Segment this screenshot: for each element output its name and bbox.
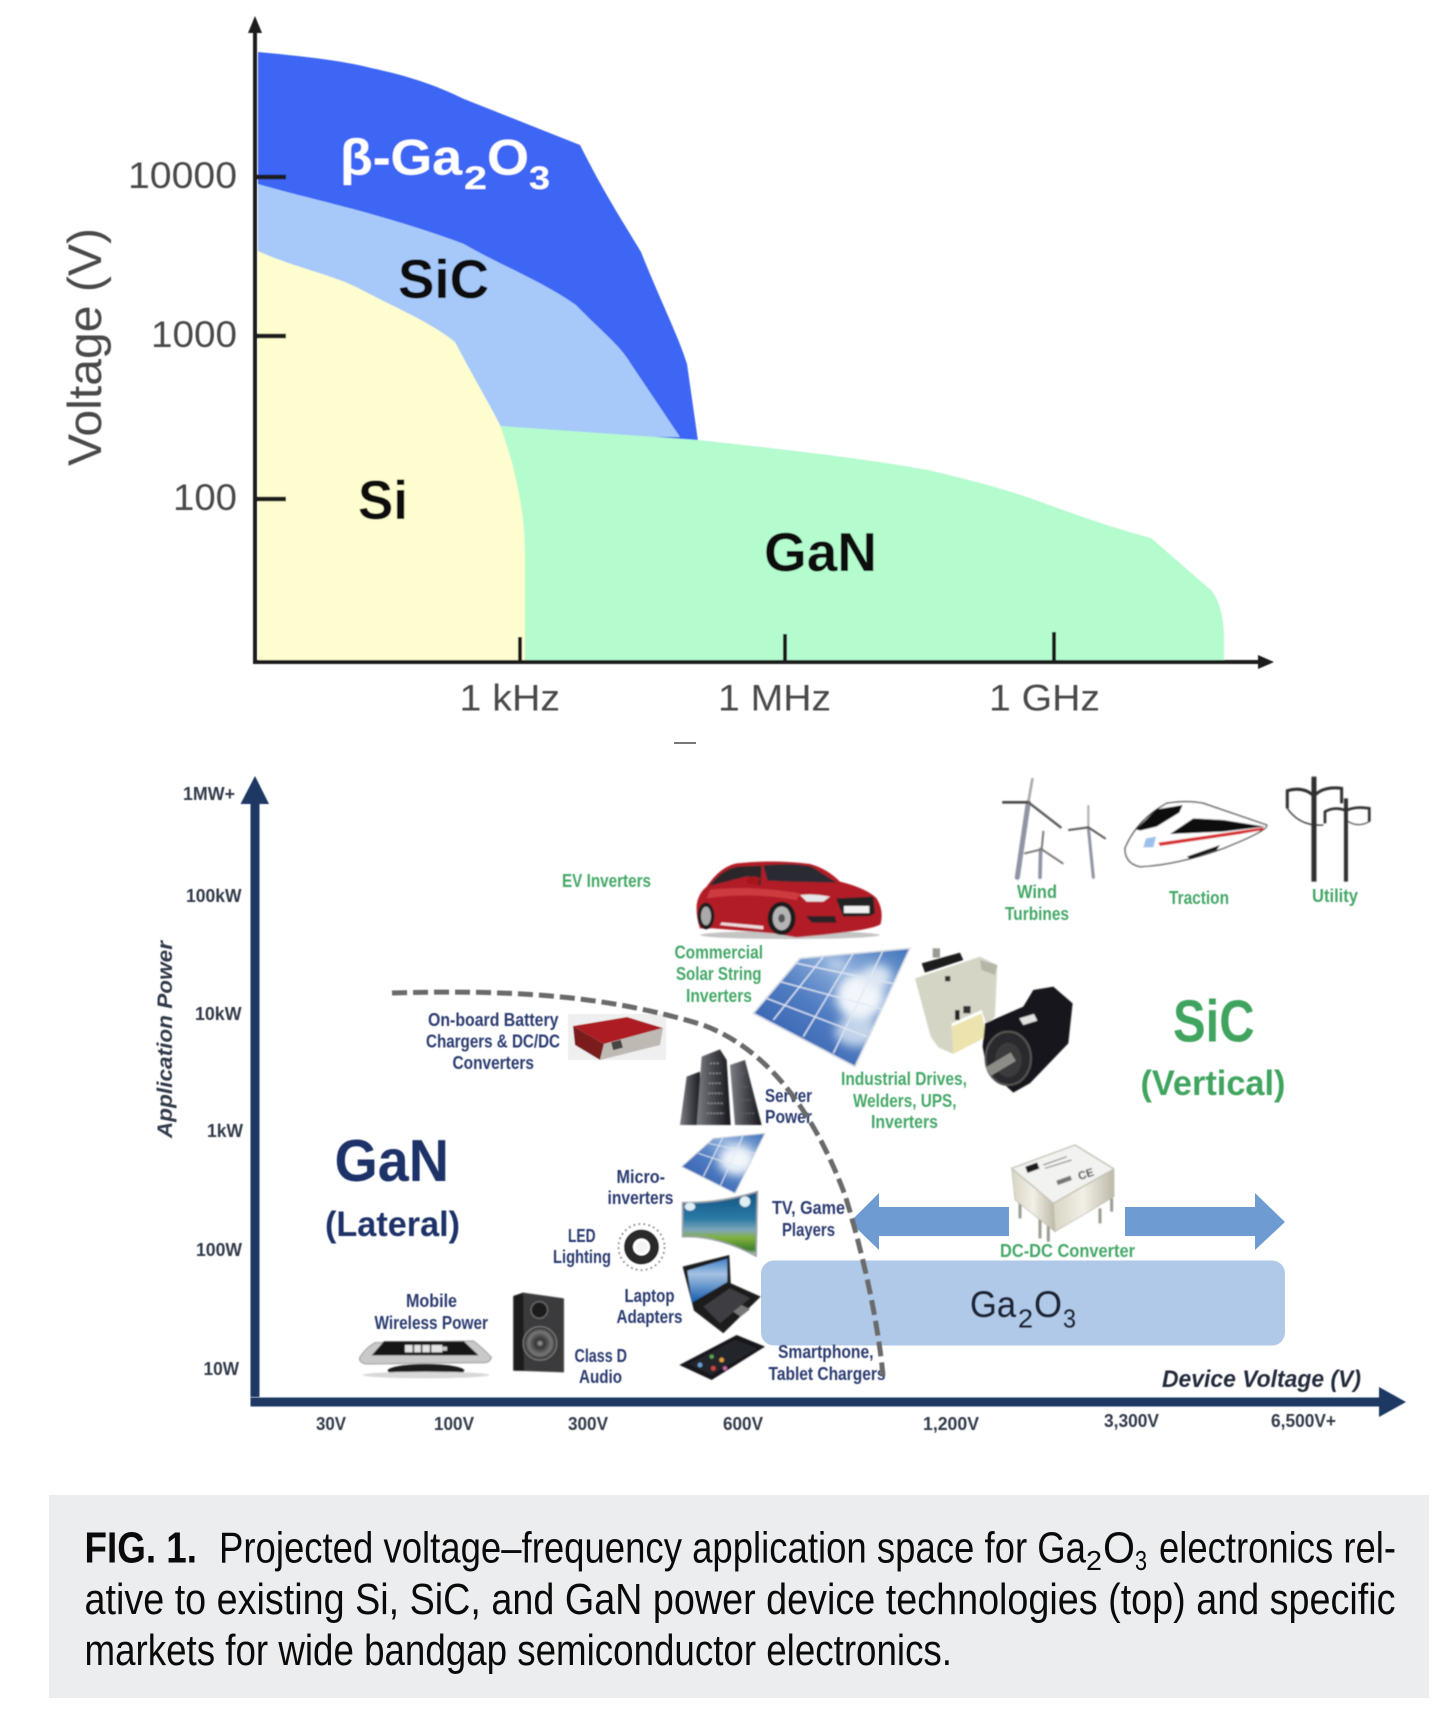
icon: utility poles — [1287, 777, 1369, 882]
application labels: SiC side: Wind — [1017, 882, 1057, 902]
y axis ticks — [255, 177, 286, 499]
arrow: right pointing voltage range — [1125, 1193, 1285, 1250]
icon: wind turbines — [1003, 779, 1105, 877]
x axis labels: 100V — [434, 1414, 474, 1434]
x tick label: 1 GHz: 1 GHz — [989, 678, 1100, 718]
application labels: SiC side: Traction — [1169, 888, 1229, 908]
y tick label: 1000: 1000 — [151, 314, 237, 355]
label: Ga2O3: Ga — [970, 1284, 1016, 1325]
application labels: SiC side — [562, 871, 1358, 1261]
application labels: GaN side: Audio — [579, 1367, 622, 1387]
application labels: GaN side: Mobile — [406, 1291, 457, 1311]
x axis ticks — [520, 632, 1054, 662]
application labels: GaN side: Players — [782, 1220, 835, 1240]
x tick label: 1 kHz: 1 kHz — [460, 678, 560, 718]
x axis title: Device Voltage (V) — [1162, 1366, 1361, 1393]
icon: electric car — [697, 861, 882, 939]
y axis labels — [183, 784, 243, 1379]
caption line 1: 3 — [1135, 1545, 1147, 1576]
label: GaN: GaN — [764, 521, 877, 583]
area: Si region — [258, 251, 525, 660]
application labels: GaN side: Server — [765, 1086, 812, 1106]
region label: GaN lateral: (Lateral) — [325, 1205, 460, 1244]
bottom chart: application power versus device voltage — [154, 776, 1406, 1434]
label: Ga2O3: 3 — [1063, 1304, 1076, 1334]
icon: LED light — [618, 1224, 664, 1270]
y tick label: 100: 100 — [173, 477, 237, 518]
application labels: GaN side: TV, Game — [772, 1198, 845, 1218]
x axis with arrow — [253, 655, 1274, 669]
y axis title: Application Power — [154, 939, 177, 1139]
label: beta-Ga2O3: 2 — [464, 160, 487, 196]
caption line 1: electronics rel- — [1159, 1524, 1396, 1572]
y axis labels: 1kW — [207, 1121, 243, 1141]
application labels: GaN side: inverters — [608, 1188, 674, 1208]
caption line 3: markets for wide bandgap semiconductor electronics. — [84, 1626, 952, 1675]
label: SiC: SiC — [398, 248, 489, 310]
region label: GaN lateral: GaN — [334, 1128, 449, 1194]
application labels: GaN side: Lighting — [553, 1247, 611, 1267]
icon: tablet — [679, 1335, 765, 1380]
icon: server towers — [680, 1049, 762, 1125]
icon: high speed train — [1125, 802, 1267, 867]
icon: television — [683, 1192, 757, 1256]
application labels: GaN side: On-board Battery — [428, 1010, 558, 1030]
y tick label: 10000: 10000 — [128, 155, 237, 196]
caption line 1: FIG. 1. — [84, 1524, 197, 1572]
x axis labels: 30V — [316, 1414, 346, 1434]
y axis title: Voltage (V) — [58, 228, 111, 466]
application labels: SiC side: Industrial Drives, — [841, 1069, 967, 1089]
icon: speaker — [513, 1293, 564, 1372]
icon: laptop — [683, 1255, 761, 1333]
x axis labels: 600V — [723, 1414, 763, 1434]
application labels: GaN side: Converters — [452, 1053, 534, 1073]
region label: GaN lateral — [325, 1128, 460, 1244]
x axis labels: 300V — [568, 1414, 608, 1434]
Ga2O3 band — [761, 1260, 1285, 1346]
icon: micro-inverter solar panel — [682, 1133, 765, 1193]
caption line 1: O — [1103, 1524, 1135, 1572]
x tick label: 1 MHz: 1 MHz — [718, 678, 831, 718]
application labels: GaN side: LED — [568, 1226, 596, 1246]
dashed boundary between GaN and SiC — [392, 992, 883, 1376]
application labels: GaN side: Laptop — [624, 1286, 674, 1306]
region label: SiC vertical — [1140, 988, 1286, 1103]
top chart: voltage versus frequency — [58, 16, 1274, 718]
y axis labels: 10kW — [195, 1004, 242, 1024]
application labels: GaN side: Chargers & DC/DC — [426, 1032, 560, 1052]
icon: DC-DC converter module: CE — [1077, 1167, 1096, 1183]
y axis labels: 10W — [204, 1359, 239, 1379]
application labels: GaN side — [374, 1010, 886, 1387]
application labels: SiC side: Inverters — [871, 1112, 938, 1132]
application labels: SiC side: Inverters — [686, 986, 752, 1006]
arrow: left pointing voltage range — [850, 1193, 1009, 1250]
label: beta-Ga2O3: β-Ga — [340, 130, 463, 186]
application labels: GaN side: Wireless Power — [374, 1313, 488, 1333]
application labels: GaN side: Smartphone, — [778, 1342, 874, 1362]
y axis with arrow — [248, 16, 262, 664]
application labels: GaN side: Tablet Chargers — [768, 1364, 886, 1384]
application labels: SiC side: Welders, UPS, — [853, 1091, 956, 1111]
caption line 1: 2 — [1086, 1545, 1102, 1576]
icon: wireless charger with phone — [359, 1341, 491, 1378]
application labels: SiC side: Turbines — [1005, 904, 1069, 924]
application labels: SiC side: EV Inverters — [562, 871, 651, 891]
x axis labels: 1,200V — [923, 1414, 979, 1434]
caption background — [49, 1495, 1429, 1698]
area: GaN region — [501, 426, 1224, 660]
region label: SiC vertical: (Vertical) — [1140, 1064, 1286, 1103]
icon: DC-DC converter module — [1012, 1145, 1114, 1242]
x axis labels: 6,500V+ — [1271, 1411, 1336, 1431]
label: Ga2O3: 2 — [1018, 1304, 1033, 1334]
application labels: SiC side: DC-DC Converter — [1000, 1241, 1135, 1261]
icon: industrial drive and motor — [915, 948, 1073, 1093]
caption line 1: Projected voltage–frequency application space for Ga — [219, 1524, 1086, 1572]
x axis with arrow — [250, 1387, 1406, 1417]
icon: on-board charger — [568, 1014, 666, 1060]
label: Ga2O3: O — [1034, 1284, 1062, 1325]
icon: commercial solar panel — [753, 948, 910, 1067]
caption panel — [49, 1495, 1429, 1698]
area: beta-Ga2O3 region — [258, 52, 698, 441]
region label: SiC vertical: SiC — [1173, 988, 1254, 1054]
application labels: SiC side: Solar String — [676, 964, 762, 984]
x axis labels — [316, 1411, 1336, 1434]
application labels: GaN side: Power — [765, 1107, 812, 1127]
application labels: SiC side: Commercial — [674, 942, 763, 962]
y axis labels: 100kW — [186, 886, 242, 906]
area: SiC region — [258, 184, 680, 437]
application labels: GaN side: Micro- — [616, 1167, 665, 1187]
y axis labels: 1MW+ — [183, 784, 235, 804]
label: beta-Ga2O3: 3 — [529, 160, 550, 196]
x axis labels: 3,300V — [1104, 1411, 1159, 1431]
application labels: GaN side: Class D — [574, 1346, 627, 1366]
application labels: SiC side: Utility — [1312, 886, 1358, 906]
label: beta-Ga2O3: O — [487, 130, 529, 186]
y axis labels: 100W — [196, 1240, 242, 1260]
application labels: GaN side: Adapters — [616, 1307, 682, 1327]
label: Si: Si — [358, 469, 408, 531]
y axis with arrow — [240, 776, 269, 1397]
